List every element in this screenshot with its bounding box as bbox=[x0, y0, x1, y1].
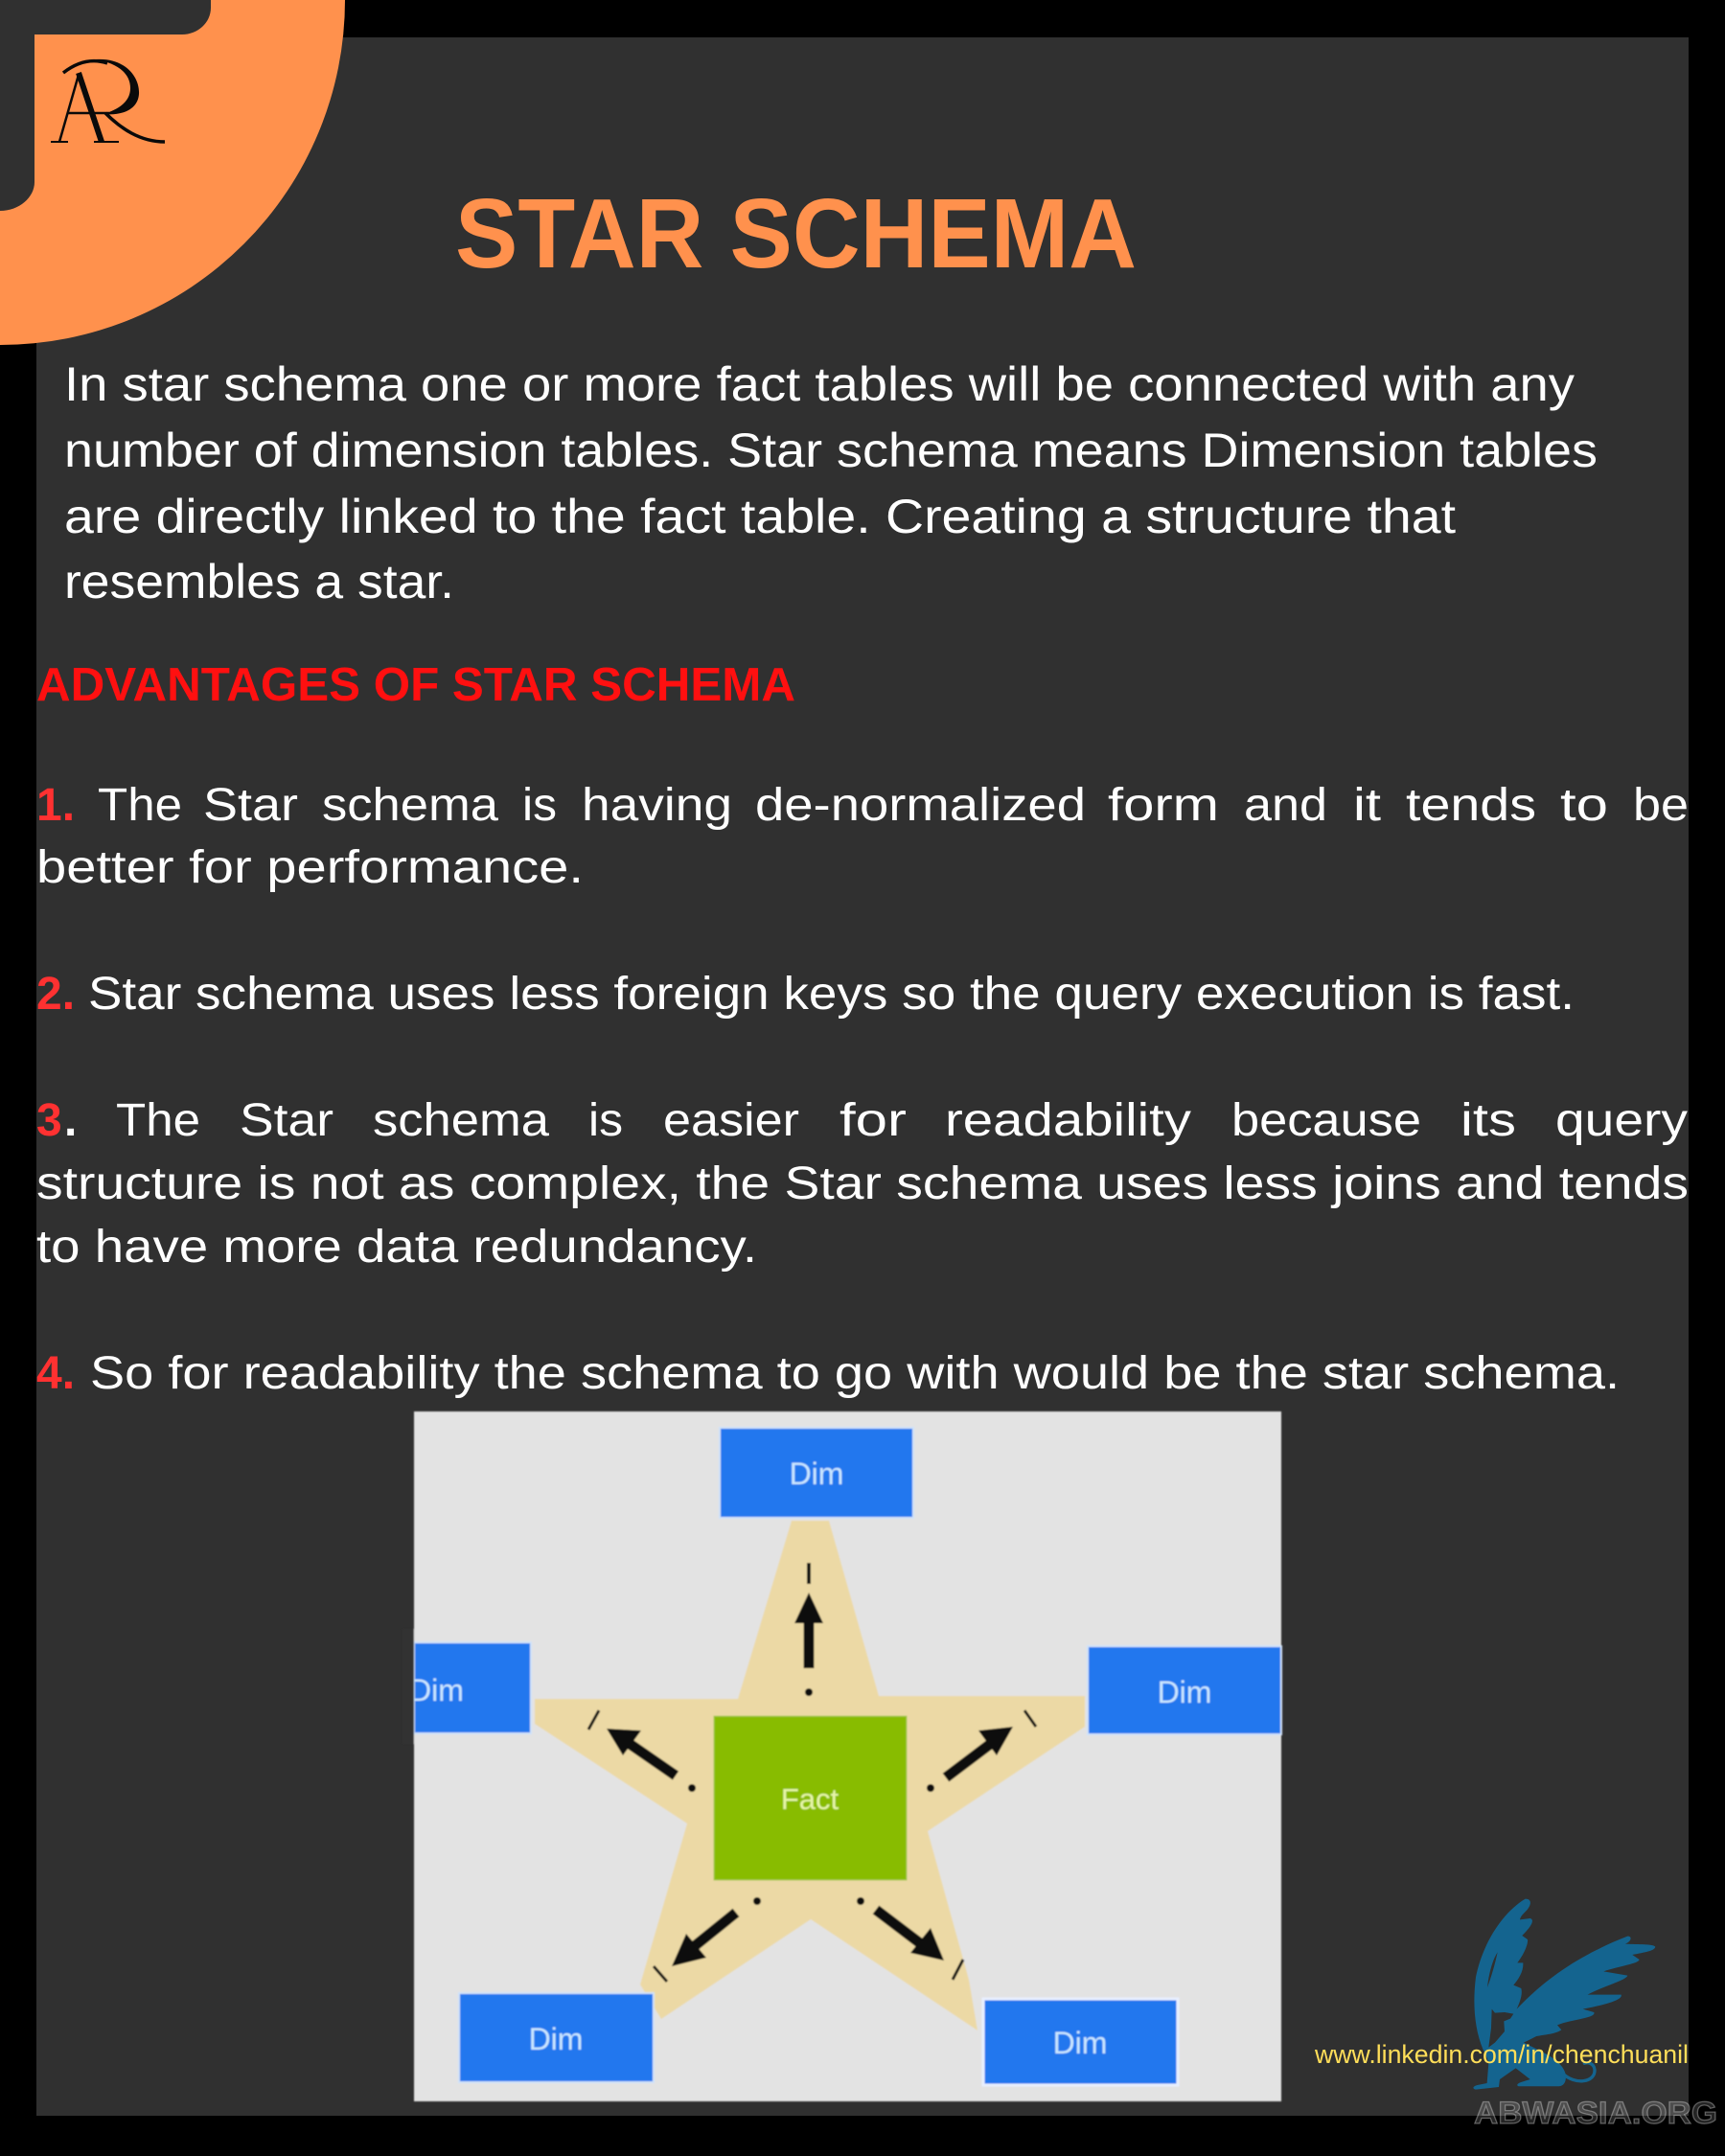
advantage 3: easier bbox=[663, 1095, 799, 1146]
heading: advantages: ADVANTAGES OF STAR SCHEMA bbox=[36, 659, 795, 711]
advantage 1: 1. bbox=[36, 780, 75, 831]
advantage 1: be bbox=[1633, 780, 1689, 831]
star shape bbox=[535, 1521, 1085, 2030]
watermark: ABWASIA.ORG bbox=[1474, 2096, 1717, 2130]
dim box bottom left bbox=[459, 1993, 654, 2082]
dim box bottom right bbox=[983, 1999, 1178, 2085]
title: STAR SCHEMA bbox=[455, 178, 1137, 288]
linkedin url: www.linkedin.com/in/chenchuanil bbox=[1314, 2040, 1689, 2069]
dim box right: Dim bbox=[1158, 1675, 1211, 1709]
arrow lower right bbox=[857, 1897, 963, 1980]
advantage 1: better for performance. bbox=[36, 842, 584, 893]
advantage 3: because bbox=[1231, 1095, 1421, 1146]
advantage 1: form bbox=[1108, 780, 1219, 831]
dim box top: Dim bbox=[790, 1456, 843, 1491]
advantage 1: and bbox=[1244, 780, 1327, 831]
arrow upper left bbox=[588, 1710, 696, 1792]
dim box left: Dim bbox=[409, 1673, 464, 1708]
advantage 4: 4. bbox=[36, 1348, 75, 1399]
advantage 3: structure is not as complex, the Star schema uses less joins and tends bbox=[36, 1158, 1689, 1209]
advantage 1: de-normalized bbox=[755, 780, 1086, 831]
advantage 3: to have more data redundancy. bbox=[36, 1222, 757, 1273]
diagram background bbox=[414, 1411, 1281, 2101]
dim box bottom left: Dim bbox=[529, 2022, 583, 2056]
advantage 4: So for readability the schema to go with would be the star schema. bbox=[90, 1348, 1620, 1399]
star schema diagram bbox=[402, 1411, 1281, 2101]
advantage 3: Star bbox=[240, 1095, 334, 1146]
fact box: Fact bbox=[781, 1782, 840, 1816]
advantage 3: for bbox=[840, 1095, 907, 1146]
advantage 3: query bbox=[1555, 1095, 1688, 1146]
intro paragraph: number of dimension tables. Star schema means Dimension tables bbox=[64, 424, 1598, 477]
advantage 3: 3 bbox=[36, 1095, 62, 1146]
dim box top bbox=[720, 1428, 913, 1518]
advantage 2: Star schema uses less foreign keys so the query execution is fast. bbox=[88, 969, 1575, 1020]
icon: griffin logo bbox=[1473, 1899, 1655, 2090]
advantage 3: is bbox=[588, 1095, 623, 1146]
arrow upper right bbox=[927, 1710, 1036, 1792]
arrow lower left bbox=[654, 1897, 761, 1982]
advantage 3: its bbox=[1460, 1095, 1516, 1146]
advantage 1 bbox=[36, 780, 1689, 893]
dim box right bbox=[1088, 1646, 1281, 1734]
advantage 3 bbox=[36, 1095, 1689, 1273]
advantage 3: . bbox=[64, 1095, 77, 1146]
advantage 1: Star bbox=[203, 780, 298, 831]
fact box bbox=[714, 1716, 907, 1880]
intro paragraph: In star schema one or more fact tables will be connected with any bbox=[64, 357, 1575, 411]
dim box left bbox=[402, 1629, 531, 1744]
intro paragraph: resembles a star. bbox=[64, 555, 454, 608]
icon: AR logo bbox=[51, 59, 165, 142]
advantage 1: having bbox=[582, 780, 732, 831]
intro paragraph bbox=[64, 357, 1598, 608]
advantage 1: schema bbox=[322, 780, 498, 831]
orange corner quarter circle bbox=[0, 0, 345, 345]
advantage 1: it bbox=[1353, 780, 1381, 831]
intro paragraph: are directly linked to the fact table. Creating a structure that bbox=[64, 490, 1456, 543]
advantage 1: is bbox=[522, 780, 557, 831]
dim box bottom right: Dim bbox=[1053, 2026, 1107, 2060]
advantage 3: schema bbox=[373, 1095, 549, 1146]
advantage 1: The bbox=[98, 780, 182, 831]
arrow up bbox=[794, 1563, 823, 1696]
advantage 1: tends bbox=[1406, 780, 1536, 831]
dark corner tab bbox=[0, 0, 211, 211]
advantage 2: 2. bbox=[36, 969, 75, 1020]
advantage 3: The bbox=[116, 1095, 200, 1146]
advantage 1: to bbox=[1560, 780, 1608, 831]
advantage 3: readability bbox=[945, 1095, 1191, 1146]
